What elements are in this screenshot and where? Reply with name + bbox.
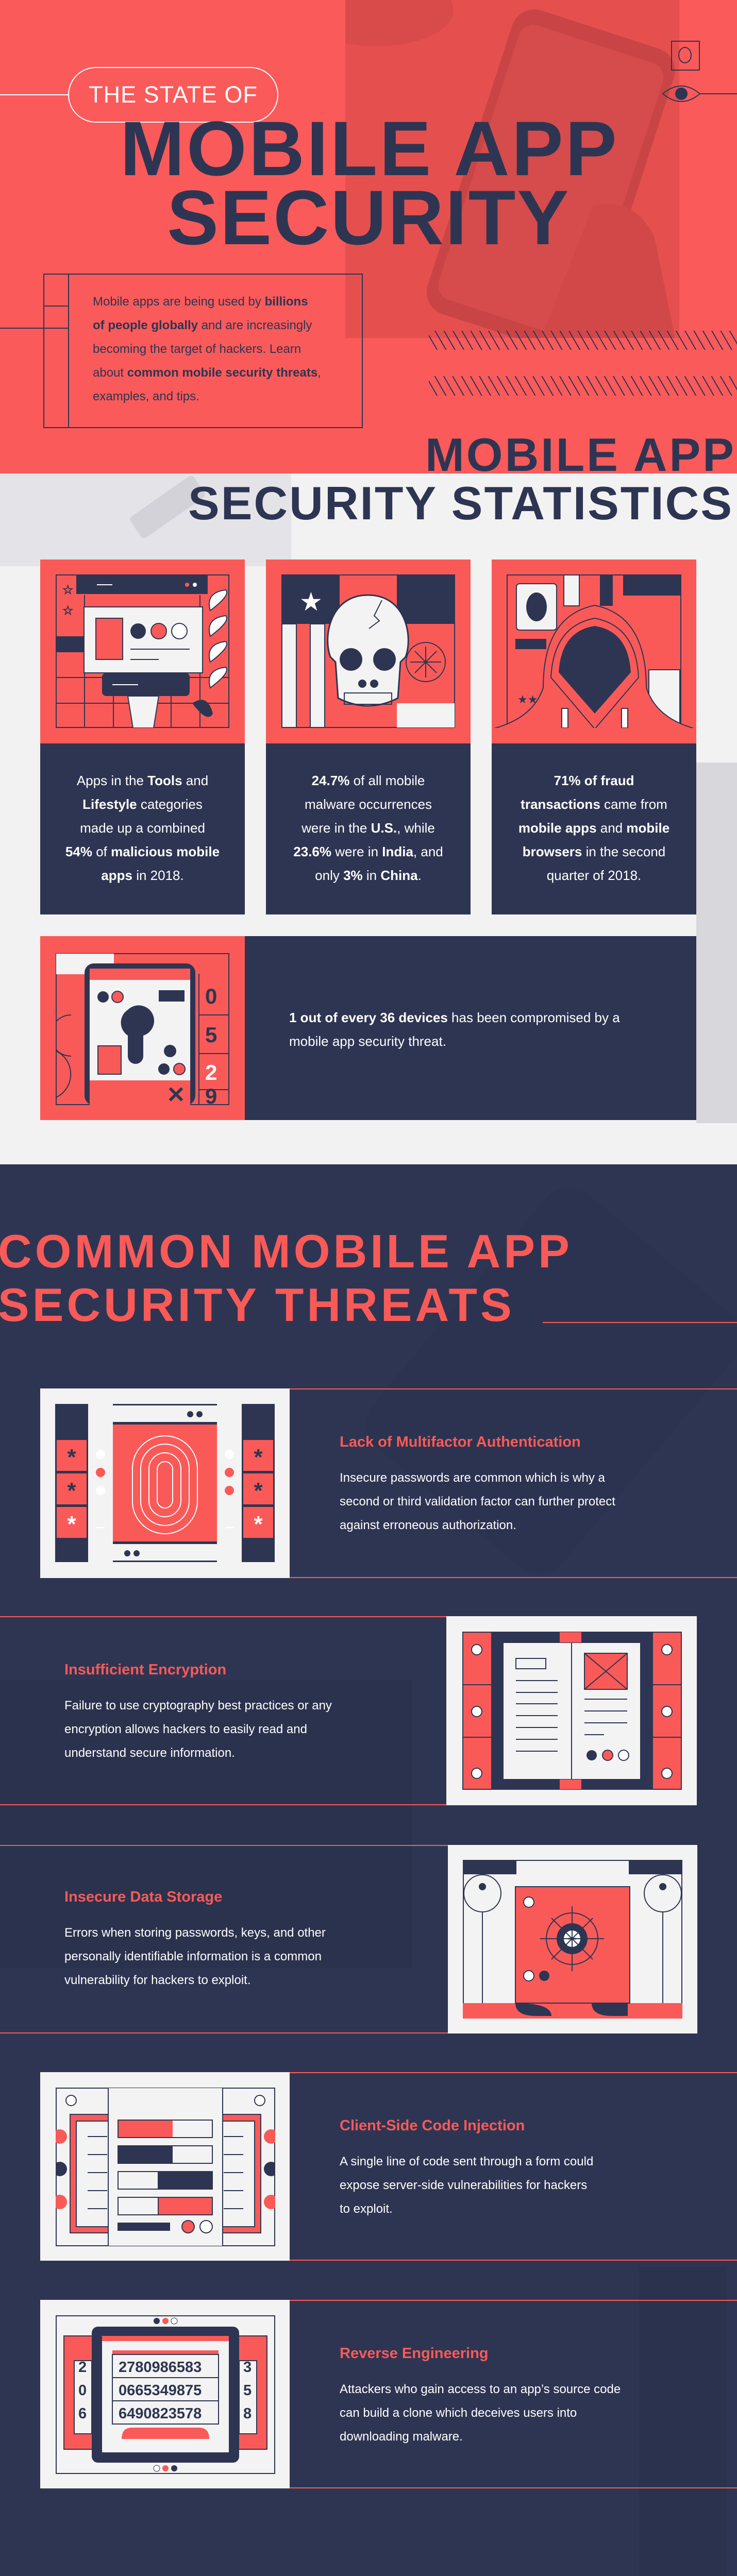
threat 4 text: A single line of code sent through a form could [340,2155,593,2168]
threat 3 text: Errors when storing passwords, keys, and other [64,1926,326,1940]
threat 1 text [340,1434,615,1532]
illustration: compromised phone: 5 [205,1023,217,1047]
threat 2 text: understand secure information. [64,1746,235,1760]
threat 4 text: to exploit. [340,2202,393,2216]
threat 2 text: Insufficient Encryption [64,1662,226,1678]
stat text 2: 24.7% of all mobile [312,773,425,788]
threat 3 text [64,1889,326,1987]
threats section background [0,1164,737,2576]
illustration: fingerprint: * [254,1445,263,1470]
illustration: skull with flags [266,560,471,743]
threat 2 [0,1616,697,1805]
threat 5 text [340,2345,621,2444]
illustration: reverse engineering numbers: 8 [243,2405,252,2422]
intro text box [43,274,363,428]
text: SECURITY [167,174,570,261]
stat text 4: 1 out of every 36 devices has been compromised by a [289,1010,620,1025]
threat 2 text: Failure to use cryptography best practices or any [64,1699,332,1713]
stat text 3: 71% of fraud [554,773,634,788]
threat 1 text: Insecure passwords are common which is why a [340,1471,605,1485]
stat text 3: transactions came from [521,796,667,812]
stat text 2: malware occurrences [305,796,432,812]
threat 1 text: Lack of Multifactor Authentication [340,1434,581,1450]
threat 1 text: against erroneous authorization. [340,1518,516,1532]
stat text 1 [65,773,220,883]
photo: hand holding phone [345,0,679,338]
stat card 2 [266,560,471,914]
threat 5 text: can build a clone which deceives users into [340,2406,577,2420]
illustration: reverse engineering numbers: 2 [78,2359,87,2376]
stat text 2: only 3% in China. [315,868,422,883]
illustration: server code injection [40,2072,290,2261]
threat 1 [40,1388,737,1578]
illustration: reverse engineering numbers: 0665349875 [119,2382,202,2399]
stat text 2 [293,773,443,883]
threat 5 text: downloading malware. [340,2430,463,2444]
intro text box: of people globally and are increasingly [93,318,312,332]
illustration: compromised phone: 0 [205,984,217,1008]
stat text 4: mobile app security threat. [289,1033,446,1049]
threat 5 text: Reverse Engineering [340,2345,489,2362]
illustration: compromised phone [40,936,245,1120]
illustration: fingerprint: * [67,1445,76,1470]
illustration: hooded hacker [492,560,696,743]
stat text 3: browsers in the second [523,844,665,859]
stat text 1: apps in 2018. [101,868,184,883]
icon: camera [671,41,700,71]
threat 4 text: Client-Side Code Injection [340,2117,525,2134]
stat text 3: mobile apps and mobile [518,820,669,836]
header background [0,0,737,473]
illustration: fingerprint: * [254,1478,263,1503]
stat text 2: 23.6% were in India, and [293,844,443,859]
threat 3 text: personally identifiable information is a common [64,1950,322,1963]
stat text 2: were in the U.S., while [301,820,435,836]
title: MOBILE APP [120,105,619,192]
illustration: reverse engineering numbers: 6490823578 [119,2405,202,2422]
illustration: malicious app: ☆ [62,604,74,618]
stat card 1 [40,560,245,914]
pill: the state of [0,94,68,95]
threat 5 text: Attackers who gain access to an app’s source code [340,2382,621,2396]
illustration: malicious app [40,560,245,743]
illustration: reverse engineering numbers: 0 [78,2382,87,2399]
threat 2 text: encryption allows hackers to easily read and [64,1722,307,1736]
illustration: compromised phone: 2 [205,1060,217,1084]
text: SECURITY THREATS [0,1279,515,1331]
stat text 1: Apps in the Tools and [77,773,208,788]
illustration: skull with flags: ★ [299,587,323,616]
hatch bands [429,331,737,350]
illustration: document [446,1616,697,1805]
stat card 4 wide [40,936,696,1120]
illustration: fingerprint [40,1388,290,1578]
illustration: reverse engineering numbers: 2780986583 [119,2359,202,2376]
threat 3 [0,1845,697,2033]
illustration: safe [448,1845,697,2033]
intro text box: examples, and tips. [93,389,199,403]
stat text 3: quarter of 2018. [547,868,641,883]
threat 3 text: Insecure Data Storage [64,1889,222,1905]
stat text 1: 54% of malicious mobile [65,844,220,859]
text: SECURITY STATISTICS [188,478,733,530]
threat 1 text: second or third validation factor can further protect [340,1495,615,1509]
threat 3 text: vulnerability for hackers to exploit. [64,1973,250,1987]
stat text 3 [518,773,669,883]
threat 5 [40,2300,737,2488]
stat text 1: Lifestyle categories [82,796,203,812]
illustration: fingerprint: * [67,1512,76,1537]
heading: security statistics: MOBILE APP [425,429,736,481]
illustration: reverse engineering numbers: 6 [78,2405,87,2422]
threat 4 text [340,2117,593,2216]
stat text 4 [289,1010,620,1049]
intro text box: Mobile apps are being used by billions [93,295,308,309]
illustration: hooded hacker: ★★ [517,693,538,706]
intro text box: becoming the target of hackers. Learn [93,342,301,356]
intro text box: about common mobile security threats, [93,366,321,380]
photo: cctv camera faint [0,473,291,566]
threat 4 text: expose server-side vulnerabilities for hackers [340,2178,587,2192]
stat card 3 [492,560,696,914]
illustration: reverse engineering numbers [40,2300,290,2488]
illustration: reverse engineering numbers: 5 [243,2382,252,2399]
stat text 1: made up a combined [80,820,205,836]
threat 2 text [64,1662,332,1760]
icon: eye [662,86,737,102]
text: THE STATE OF [89,81,258,108]
illustration: malicious app: ☆ [62,583,74,597]
threat 4 [40,2072,737,2261]
illustration: reverse engineering numbers: 3 [243,2359,252,2376]
heading: security threats: COMMON MOBILE APP [0,1226,573,1278]
illustration: fingerprint: * [67,1478,76,1503]
illustration: fingerprint: * [254,1512,263,1537]
marble right [696,762,737,1123]
